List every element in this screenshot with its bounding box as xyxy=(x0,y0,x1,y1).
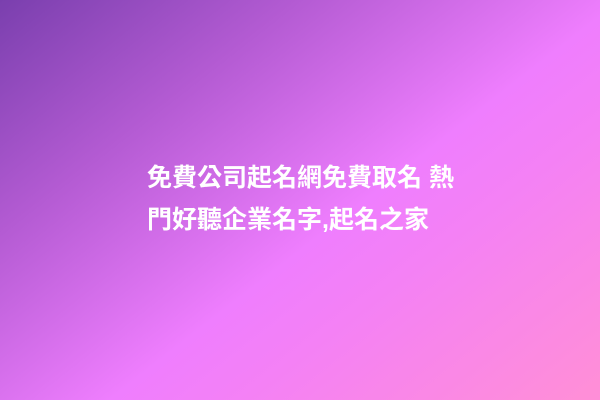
title: 免費公司起名網免費取名 熱 xyxy=(147,164,454,192)
title: 門好聽企業名字,起名之家 xyxy=(147,206,429,234)
title xyxy=(147,164,454,234)
